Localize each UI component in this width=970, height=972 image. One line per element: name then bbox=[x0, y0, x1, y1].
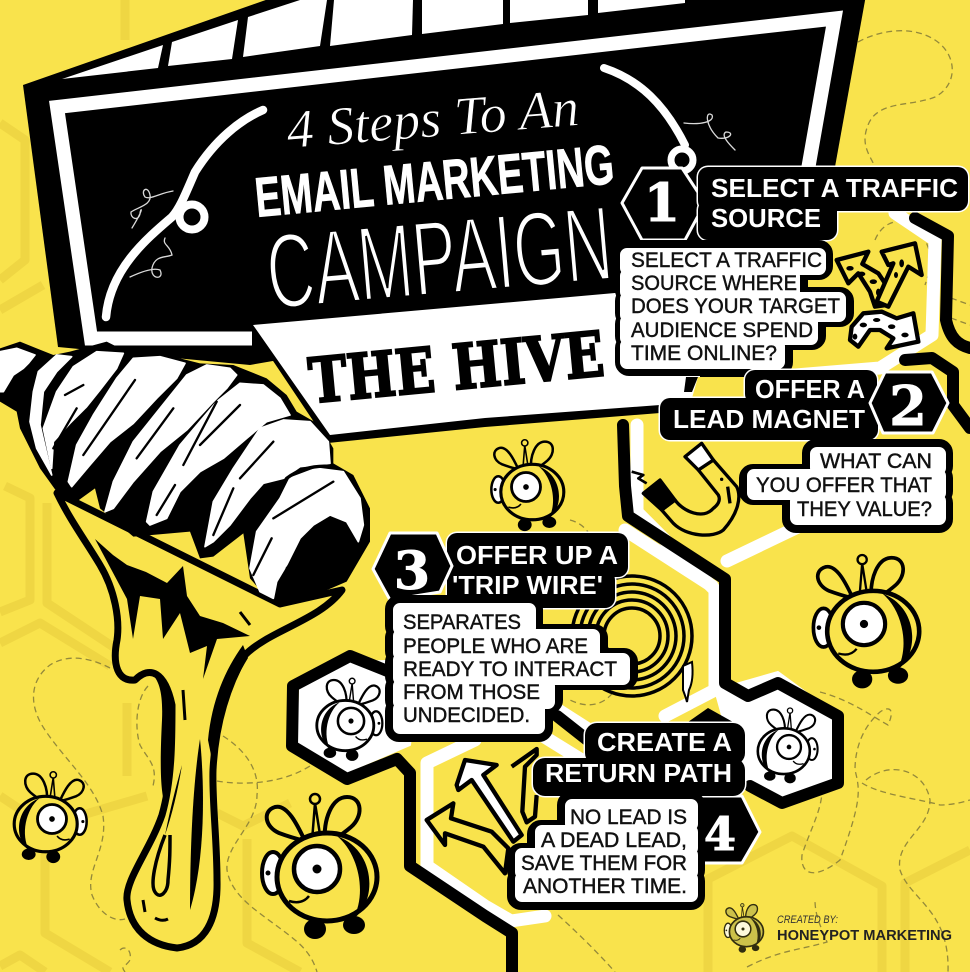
title: 4 Steps To An: 4 Steps To An bbox=[284, 77, 581, 160]
icon: return path arrows bbox=[427, 749, 537, 873]
heading: THE HIVE: THE HIVE bbox=[306, 317, 607, 418]
heading pill 1: SELECT A TRAFFIC bbox=[711, 173, 958, 203]
body bubble 1 bbox=[623, 248, 846, 368]
title: EMAIL MARKETING: EMAIL MARKETING bbox=[252, 132, 617, 229]
bee: top centre bbox=[491, 440, 564, 531]
bee: left hex cell bbox=[317, 678, 382, 761]
banner black edge bbox=[247, 288, 745, 443]
credit: created by honeypot marketing bbox=[724, 904, 952, 953]
bee: right hex cell bbox=[758, 708, 818, 783]
heading pill 1: SOURCE bbox=[711, 203, 821, 233]
title: CAMPAIGN: CAMPAIGN bbox=[262, 184, 617, 332]
body bubble 1: TIME ONLINE? bbox=[631, 342, 777, 365]
heading pill 3 bbox=[447, 533, 628, 608]
white right hex cell bbox=[715, 672, 838, 803]
heading pill 4: RETURN PATH bbox=[545, 758, 732, 788]
body bubble 3: UNDECIDED. bbox=[403, 704, 530, 727]
dipper head bbox=[0, 342, 370, 602]
body bubble 3 bbox=[393, 603, 630, 734]
callout 2: offer a lead magnet bbox=[660, 370, 948, 525]
number badge 3 bbox=[373, 533, 452, 602]
body bubble 3: PEOPLE WHO ARE bbox=[403, 635, 588, 658]
callout 3: offer up a trip wire bbox=[373, 533, 630, 734]
body bubble 1: SOURCE WHERE bbox=[631, 272, 797, 295]
body bubble 2: WHAT CAN bbox=[820, 450, 932, 473]
bee: bottom left bbox=[14, 772, 87, 863]
white left hex cell bbox=[298, 660, 420, 772]
dipper silhouette bbox=[0, 342, 370, 602]
body bubble 1: SELECT A TRAFFIC bbox=[631, 249, 822, 272]
number badge 2: 2 bbox=[889, 374, 927, 438]
clapper stripes bbox=[62, 0, 685, 79]
dipper hatch marks bbox=[53, 380, 333, 575]
callout 1: select a traffic source bbox=[622, 167, 968, 368]
dipper white lobes bbox=[0, 348, 363, 598]
decorative curve right bbox=[604, 68, 685, 145]
black cap above create a bbox=[688, 708, 733, 722]
decorative curve left bbox=[106, 68, 735, 317]
heading pill 1 bbox=[698, 167, 968, 240]
black hex lines bbox=[292, 218, 970, 972]
number badge 4 bbox=[690, 796, 760, 863]
body bubble 4: A DEAD LEAD, bbox=[541, 829, 687, 852]
board black shape bbox=[23, 0, 866, 365]
banner notch bbox=[692, 377, 745, 398]
body bubble 3: FROM THOSE bbox=[403, 681, 540, 704]
body bubble 2: THEY VALUE? bbox=[797, 498, 932, 521]
banner black sliver bbox=[684, 377, 698, 392]
number badge 4: 4 bbox=[704, 807, 736, 861]
number badge 1 bbox=[622, 168, 705, 240]
heading pill 2: LEAD MAGNET bbox=[673, 404, 865, 434]
company name: HONEYPOT MARKETING bbox=[777, 928, 952, 944]
logo bee bbox=[724, 904, 763, 953]
white inner frame bbox=[57, 18, 834, 338]
body bubble 1: AUDIENCE SPEND bbox=[631, 319, 813, 342]
bee: bottom centre bbox=[262, 794, 377, 939]
honey drip bbox=[57, 493, 342, 948]
sign board bbox=[23, 0, 866, 365]
body bubble 3: READY TO INTERACT bbox=[403, 658, 617, 681]
body bubble 4 bbox=[515, 799, 697, 902]
callout 4: create a return path bbox=[515, 723, 760, 902]
heading pill 4 bbox=[533, 723, 745, 796]
created by label: CREATED BY: bbox=[777, 914, 838, 926]
road dashes bbox=[846, 259, 909, 340]
heading pill 4: CREATE A bbox=[597, 727, 732, 757]
number badge 2 bbox=[870, 372, 948, 438]
body bubble 4: NO LEAD IS bbox=[570, 806, 687, 829]
heading pill 2 bbox=[660, 370, 878, 440]
banner white bbox=[253, 290, 745, 435]
white hex lines bbox=[427, 213, 935, 921]
heading pill 3: 'TRIP WIRE' bbox=[452, 570, 603, 600]
honey shadows bbox=[95, 539, 250, 920]
body bubble 4: ANOTHER TIME. bbox=[523, 875, 687, 898]
body bubble 4: SAVE THEM FOR bbox=[521, 852, 687, 875]
honey dipper bbox=[0, 342, 370, 948]
body bubble 2 bbox=[747, 447, 945, 525]
heading pill 2: OFFER A bbox=[755, 374, 865, 404]
body bubble 3: SEPARATES bbox=[403, 611, 521, 634]
heading pill 3: OFFER UP A bbox=[456, 540, 618, 570]
body bubble 2: YOU OFFER THAT bbox=[756, 474, 932, 497]
banner: The Hive bbox=[247, 288, 745, 443]
bee: right bbox=[813, 555, 919, 688]
number badge 1: 1 bbox=[644, 173, 680, 234]
honeycomb network lines bbox=[292, 213, 970, 972]
icon: magnet bbox=[632, 443, 739, 535]
body bubble 1: DOES YOUR TARGET bbox=[631, 295, 840, 318]
icon: traffic arrows bbox=[837, 243, 922, 348]
icon: trip wire coil bbox=[572, 576, 693, 702]
number badge 3: 3 bbox=[394, 541, 430, 602]
